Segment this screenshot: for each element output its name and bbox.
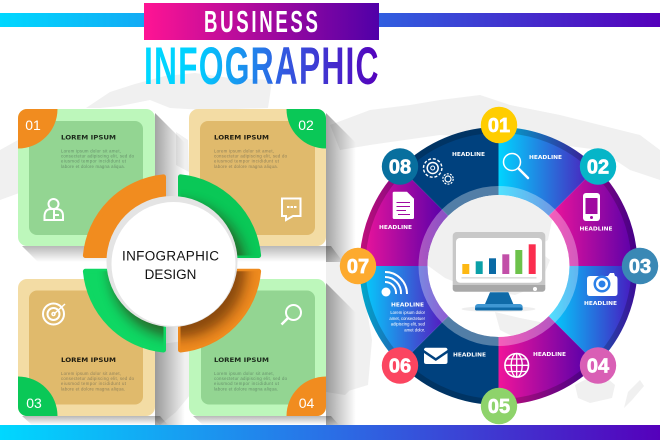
card 04: labore et dolore magna aliqua.: [214, 386, 278, 391]
icon: wifi: [382, 272, 407, 296]
inner circle: [428, 195, 570, 337]
number badges: 01: [488, 115, 510, 137]
title banner: BUSINESS: [204, 5, 321, 39]
icon: person: [44, 199, 63, 220]
card 04: LOREM IPSUM: [214, 357, 269, 364]
card 03: eiusmod tempor incididunt ut: [61, 381, 127, 386]
card 02: labore et dolore magna aliqua.: [214, 164, 278, 169]
paragraph segment 06: amet dolor.: [404, 327, 425, 332]
number badges: 07: [347, 256, 369, 278]
card shadows: [22, 113, 356, 425]
paragraph segment 06: [389, 310, 426, 332]
card 01: labore et dolore magna aliqua.: [61, 164, 125, 169]
bottom bar: [0, 425, 660, 440]
card 03: 03: [26, 395, 42, 411]
number badges: 04: [587, 356, 610, 378]
icon: phone: [583, 193, 600, 221]
card 04: consectetur adipiscing elit, sed do: [214, 376, 288, 381]
paragraph segment 06: amet, consectetuer: [389, 316, 426, 321]
card 04: [189, 279, 326, 416]
icon: gears: [424, 159, 453, 184]
segment labels: HEADLINE: [584, 301, 617, 307]
card 04: eiusmod tempor incididunt ut: [214, 381, 280, 386]
icon: target: [43, 304, 65, 324]
paragraph segment 06: Lorem ipsum dolor: [390, 310, 426, 315]
world map background: [0, 73, 660, 425]
segment labels: HEADLINE: [379, 225, 412, 231]
number badges: 06: [389, 356, 411, 378]
card 04: Lorem ipsum dolor sit amet,: [214, 371, 274, 376]
monitor: [453, 232, 545, 312]
card 02: [189, 109, 326, 246]
wheel segments: [498, 127, 597, 266]
left panel: four cards: [18, 109, 353, 425]
card 02: LOREM IPSUM: [214, 134, 269, 142]
icon: chat bubble: [282, 198, 300, 220]
segment labels: HEADLINE: [391, 302, 424, 308]
title banner: [144, 3, 379, 40]
icon: globe: [505, 354, 528, 377]
card 04: 04: [299, 395, 314, 411]
right panel: eight segment wheel: [340, 107, 658, 424]
card 02: consectetur adipiscing elit, sed do: [214, 154, 288, 158]
card 03: Lorem ipsum dolor sit amet,: [61, 371, 121, 376]
inner map: [428, 195, 552, 336]
card 01: eiusmod tempor incididunt ut: [61, 159, 127, 164]
segment labels: HEADLINE: [533, 352, 566, 358]
segment labels: HEADLINE: [580, 226, 613, 232]
paragraph segment 06: adipiscing elit, sed: [391, 322, 426, 327]
card 02: Lorem ipsum dolor sit amet,: [214, 148, 274, 154]
icon: magnifier: [504, 154, 528, 178]
icon: envelope: [424, 348, 448, 364]
segment labels: HEADLINE: [453, 352, 486, 358]
card 01: 01: [25, 117, 41, 133]
segment labels: HEADLINE: [452, 152, 485, 158]
center circle: DESIGN: [145, 267, 196, 282]
number badges: [340, 107, 658, 424]
card 03: [18, 279, 155, 416]
card 03: consectetur adipiscing elit, sed do: [61, 376, 135, 381]
title: infographic: INFOGRAPHIC: [144, 37, 380, 96]
card 01: consectetur adipiscing elit, sed do: [61, 154, 135, 158]
top bar: [0, 13, 660, 27]
center circle: INFOGRAPHIC: [122, 249, 219, 264]
icon: camera: [587, 273, 618, 296]
icon: document: [393, 192, 414, 219]
segment labels: HEADLINE: [529, 155, 562, 161]
card 01: LOREM IPSUM: [61, 134, 116, 142]
number badges: 05: [488, 396, 510, 418]
card 01: Lorem ipsum dolor sit amet,: [61, 148, 121, 154]
number badges: 08: [389, 156, 411, 178]
segment labels: [379, 152, 617, 358]
center circle: [106, 196, 238, 327]
icon: magnifier: [282, 305, 301, 324]
card 02: 02: [298, 117, 314, 133]
card 03: LOREM IPSUM: [61, 357, 116, 364]
number badges: 02: [587, 156, 609, 178]
center ring with four arcs: [85, 177, 259, 350]
card 01: [18, 109, 155, 246]
card 02: eiusmod tempor incididunt ut: [214, 159, 280, 164]
number badges: 03: [629, 256, 651, 278]
card 03: labore et dolore magna aliqua.: [61, 386, 125, 391]
